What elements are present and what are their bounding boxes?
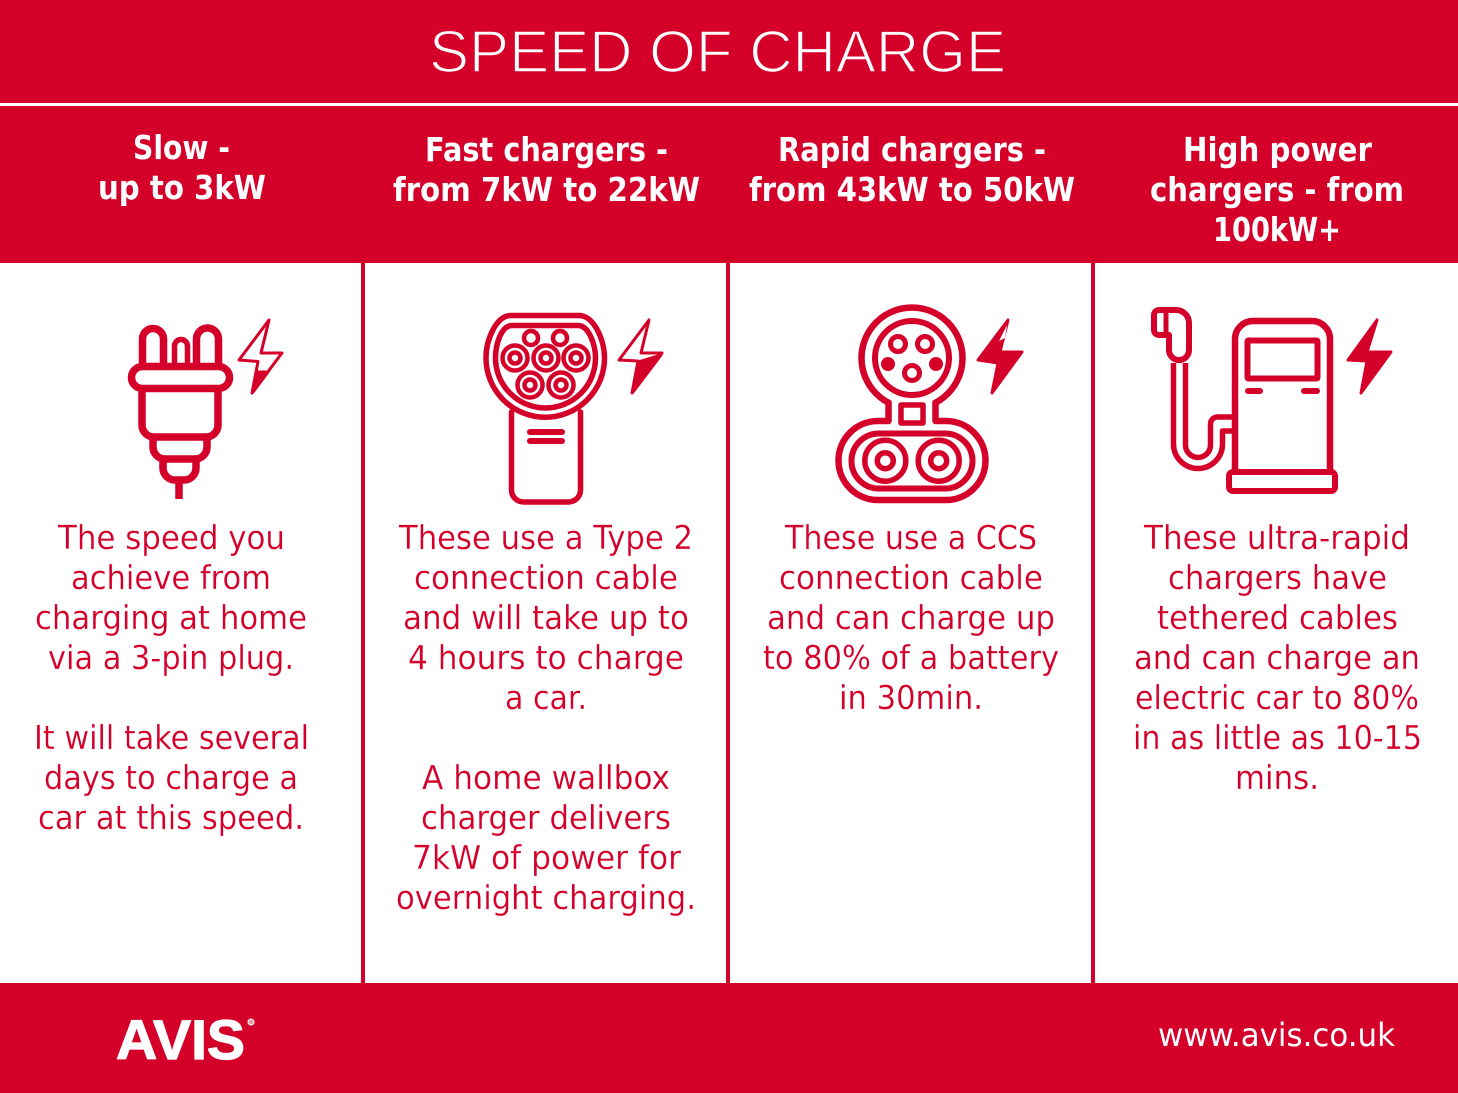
text block: rapid charging: These use a CCS	[784, 518, 1037, 557]
text block: slow charging: charging at home	[35, 598, 307, 637]
heading: high power chargers: chargers - from	[1150, 170, 1404, 209]
text block: fast charging: 7kW of power for	[412, 838, 681, 877]
heading: slow	[98, 128, 266, 207]
header band	[0, 0, 1458, 263]
heading: fast chargers: Fast chargers -	[425, 130, 668, 169]
text block: rapid charging: in 30min.	[839, 678, 983, 717]
icon: plug with outline bolt	[132, 320, 282, 499]
text block: rapid charging: to 80% of a battery	[763, 638, 1059, 677]
text block: fast charging: charger delivers	[421, 798, 671, 837]
text block: high power charging: in as little as 10-15	[1133, 718, 1422, 757]
text block: fast charging: overnight charging.	[396, 878, 696, 917]
website url: www.avis.co.uk	[1158, 1016, 1395, 1054]
heading: slow: Slow -	[133, 128, 230, 167]
text block: fast charging: a car.	[505, 678, 587, 717]
heading: fast chargers	[393, 130, 700, 209]
icon: CCS connector with mostly filled bolt	[838, 308, 1022, 500]
text block: rapid charging	[763, 518, 1059, 717]
text block: slow charging: It will take several	[34, 718, 309, 757]
text block: slow charging	[34, 518, 309, 837]
text block: high power charging: These ultra-rapid	[1143, 518, 1410, 557]
title: SPEED OF CHARGE	[429, 19, 1006, 85]
text block: fast charging: A home wallbox	[422, 758, 670, 797]
heading: fast chargers: from 7kW to 22kW	[393, 170, 700, 209]
text block: high power charging: mins.	[1235, 758, 1319, 797]
text block: fast charging: 4 hours to charge	[408, 638, 684, 677]
heading: rapid chargers	[749, 130, 1075, 209]
text block: fast charging	[396, 518, 696, 917]
text block: fast charging: These use a Type 2	[398, 518, 693, 557]
text block: slow charging: days to charge a	[44, 758, 298, 797]
heading: rapid chargers: Rapid chargers -	[778, 130, 1046, 169]
text block: slow charging: achieve from	[71, 558, 271, 597]
text block: rapid charging: connection cable	[779, 558, 1043, 597]
text block: fast charging: connection cable	[414, 558, 678, 597]
icon: type 2 connector with part-filled bolt	[486, 316, 662, 502]
icon: high power charging pump with solid bolt	[1154, 310, 1391, 491]
text block: high power charging: tethered cables	[1157, 598, 1398, 637]
heading: high power chargers: High power	[1183, 130, 1373, 169]
text block: slow charging: The speed you	[57, 518, 285, 557]
heading: high power chargers	[1150, 130, 1404, 249]
heading: high power chargers: 100kW+	[1213, 210, 1341, 249]
logo: AVIS: AVIS	[116, 1008, 245, 1071]
footer band	[0, 983, 1458, 1093]
text block: fast charging: and will take up to	[403, 598, 689, 637]
text block: rapid charging: and can charge up	[767, 598, 1055, 637]
text block: high power charging: electric car to 80%	[1135, 678, 1419, 717]
text block: high power charging: and can charge an	[1134, 638, 1420, 677]
heading: rapid chargers: from 43kW to 50kW	[749, 170, 1075, 209]
text block: slow charging: car at this speed.	[38, 798, 304, 837]
text block: slow charging: via a 3-pin plug.	[48, 638, 294, 677]
text block: high power charging	[1133, 518, 1422, 797]
text block: high power charging: chargers have	[1168, 558, 1387, 597]
heading: slow: up to 3kW	[98, 168, 266, 207]
